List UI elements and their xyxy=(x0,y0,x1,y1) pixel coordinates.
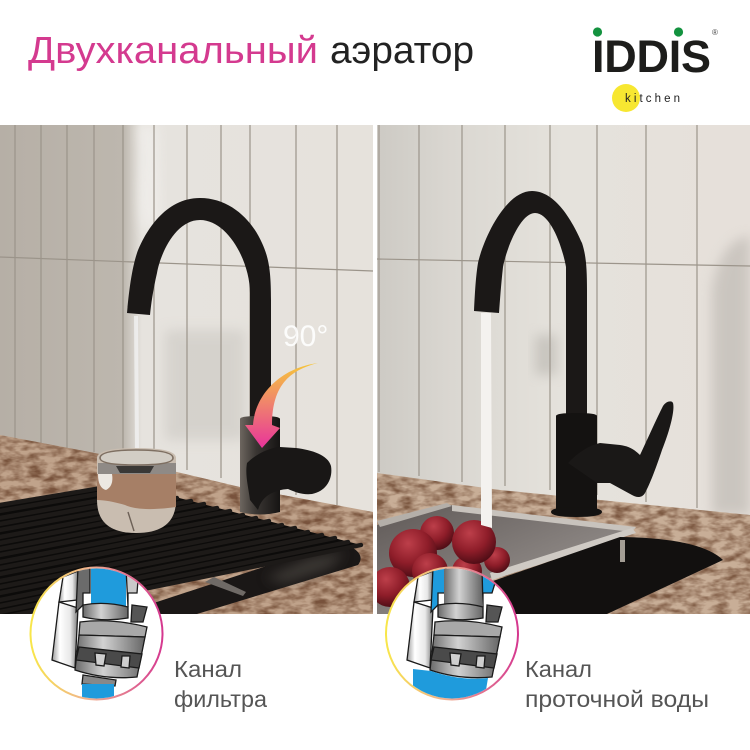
faucet: lever xyxy=(246,447,331,510)
arrow: rotation 90 degrees xyxy=(245,363,318,448)
caption: flow water channel xyxy=(525,656,709,712)
logo: IDDIS kitchen: kitchen xyxy=(625,93,680,105)
caption: flow water channel: Канал xyxy=(525,656,592,682)
title: аэратор xyxy=(330,30,474,72)
panel: filter channel photo xyxy=(0,125,373,618)
panel: flow water photo xyxy=(370,125,750,614)
caption: filter channel xyxy=(174,656,267,712)
logo: IDDIS kitchen: ® xyxy=(712,28,718,37)
caption: filter channel: Канал xyxy=(174,656,242,682)
faucet: gooseneck spout xyxy=(127,198,271,425)
logo: IDDIS kitchen xyxy=(592,27,718,112)
caption: flow water channel: проточной воды xyxy=(525,686,709,712)
wall tiles xyxy=(0,125,373,525)
countertop xyxy=(0,430,373,614)
countertop xyxy=(377,470,750,614)
drying mat rods xyxy=(0,484,361,618)
water stream xyxy=(481,313,492,528)
faucet: gooseneck spout xyxy=(474,191,587,420)
label: 90°: 90° xyxy=(283,320,328,353)
faucet: base plate xyxy=(551,508,602,517)
logo: IDDIS kitchen: IDDIS xyxy=(592,31,711,82)
wall tiles xyxy=(377,125,750,525)
sink: steel basin xyxy=(377,505,635,614)
title xyxy=(28,30,474,72)
sink: black basin xyxy=(493,537,723,614)
faucet: body xyxy=(556,413,597,510)
sink basin xyxy=(156,548,361,614)
water stream xyxy=(134,316,139,452)
glass xyxy=(97,448,176,533)
aerator cross-section: filter channel xyxy=(52,568,147,702)
caption: filter channel: фильтра xyxy=(174,686,267,712)
aerator cross-section: flow channel xyxy=(407,568,502,702)
title: Двухканальный xyxy=(28,30,318,72)
callout: filter channel xyxy=(30,568,162,702)
faucet: lever handle xyxy=(597,401,674,497)
faucet: body xyxy=(240,416,280,514)
plums xyxy=(370,516,510,607)
callout: flow water channel xyxy=(386,568,518,702)
